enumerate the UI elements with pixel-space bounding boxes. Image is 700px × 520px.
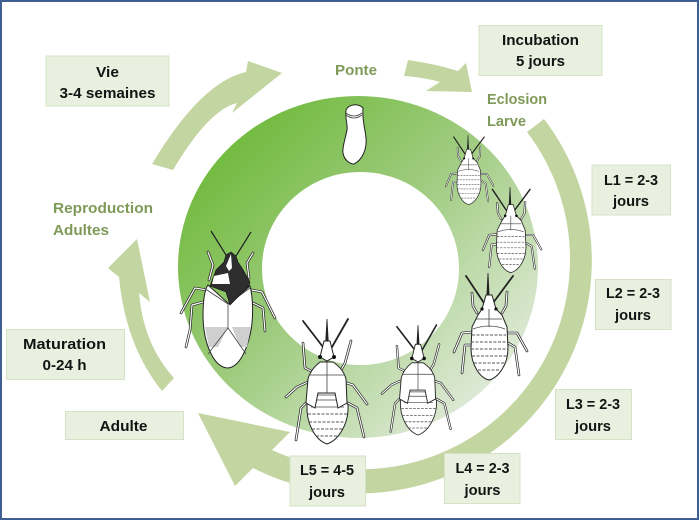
- box: L5: jours: [308, 485, 345, 501]
- arrow: ponte to eclosion: [404, 60, 472, 92]
- box: L3: [556, 390, 632, 440]
- label: Ponte: Ponte: [335, 63, 377, 79]
- icon: nymph L5: [286, 319, 367, 444]
- box: Incubation: [479, 26, 602, 76]
- box: L4: [444, 454, 520, 504]
- label: Eclosion Larve: [487, 92, 547, 130]
- box: L4: L4 = 2-3: [456, 461, 510, 477]
- arrow: larval stages, right arc: [198, 119, 592, 493]
- box: L4: jours: [463, 483, 500, 499]
- icon: egg: [343, 105, 366, 164]
- label: Reproduction Adultes: [53, 201, 153, 239]
- label: Reproduction Adultes: Reproduction: [53, 201, 153, 217]
- box: L3: L3 = 2-3: [566, 397, 620, 413]
- box: Maturation: [6, 330, 124, 380]
- box: Adulte: Adulte: [100, 419, 148, 435]
- label: Eclosion Larve: Eclosion: [487, 92, 547, 108]
- box: Vie: 3-4 semaines: [60, 86, 156, 102]
- box: L5: [290, 456, 366, 506]
- box: L1: [592, 165, 670, 215]
- box: Incubation: 5 jours: [516, 54, 565, 70]
- arrow: adult to reproduction: [108, 239, 174, 391]
- arrow: reproduction to ponte: [152, 61, 282, 170]
- green gradient ring: [178, 96, 538, 438]
- box: L2: jours: [614, 308, 651, 324]
- box: Maturation: Maturation: [23, 337, 106, 353]
- box: L2: L2 = 2-3: [606, 286, 660, 302]
- box: Vie: Vie: [96, 65, 119, 81]
- box: Maturation: 0-24 h: [42, 358, 86, 374]
- box: L1: L1 = 2-3: [604, 173, 658, 189]
- box: L2: [596, 280, 671, 330]
- box: L3: jours: [574, 419, 611, 435]
- label: Eclosion Larve: Larve: [487, 114, 526, 130]
- icon: larva L2: [483, 187, 541, 273]
- box: Vie: [46, 56, 169, 106]
- label: Reproduction Adultes: Adultes: [53, 223, 109, 239]
- box: Adulte: [66, 412, 184, 440]
- box: L5: L5 = 4-5: [300, 463, 354, 479]
- box: L1: jours: [612, 194, 649, 210]
- icon: nymph L4: [382, 325, 453, 435]
- box: Incubation: Incubation: [502, 33, 579, 49]
- icon: adult bug: [181, 231, 275, 368]
- icon: larva L1: [446, 135, 493, 205]
- icon: larva L3: [454, 273, 527, 380]
